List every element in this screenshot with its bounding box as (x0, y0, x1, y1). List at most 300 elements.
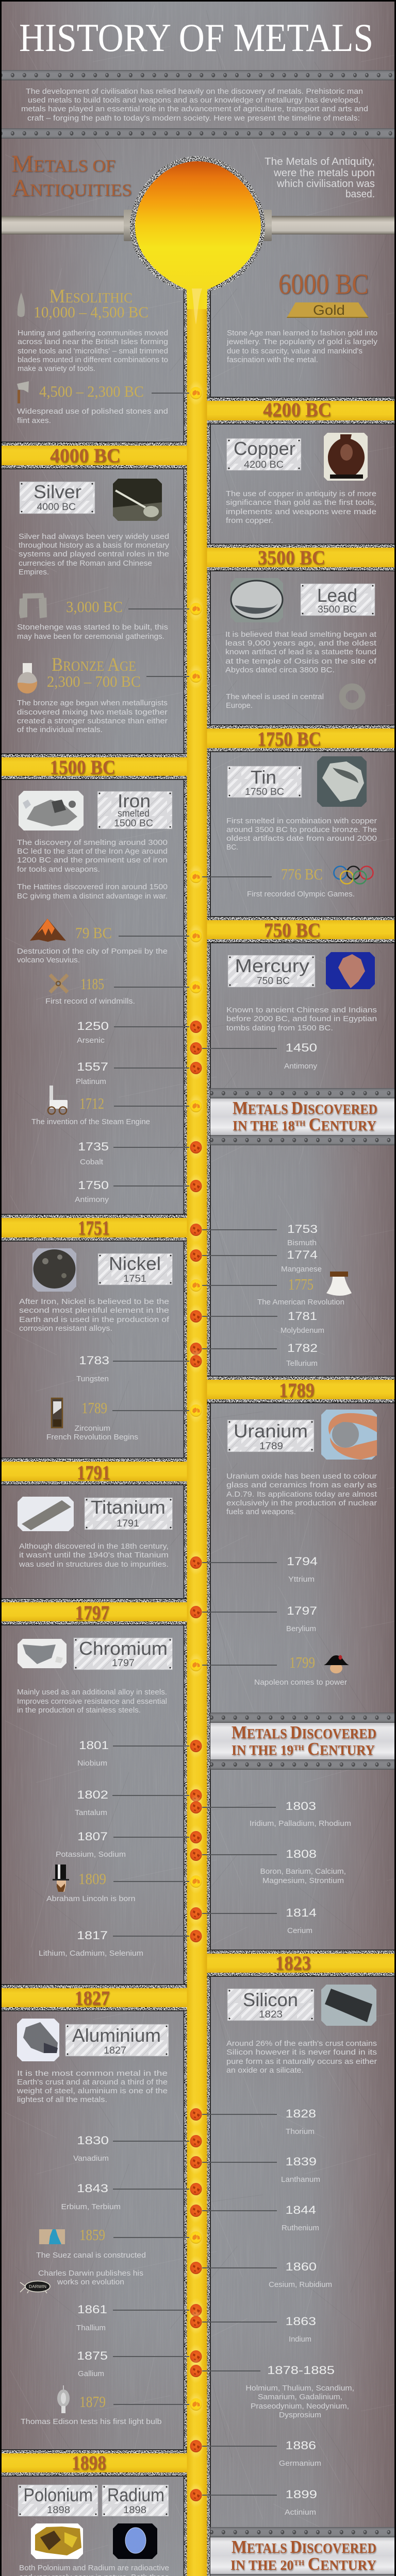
marker: 1809 lincoln: 1809 (78, 1870, 106, 1888)
marker: 1875 gallium: 1875 (77, 2349, 108, 2362)
text block: volcano Vesuvius. (17, 956, 80, 964)
text block: fuels and weapons. (226, 1508, 296, 1516)
marker: 1886 germanium (188, 2434, 321, 2468)
icon: napoleon hat (324, 1655, 349, 1673)
panel: chromium (17, 1638, 172, 1715)
marker: 1886 germanium: Germanium (279, 2460, 321, 2468)
molten metal timeline column (187, 289, 207, 2576)
text block: blades mounted in different combinations to (18, 356, 168, 364)
marker: 1878-1885: Dysprosium (279, 2411, 321, 2419)
marker: 1250 arsenic: Arsenic (77, 1037, 105, 1045)
bar: 4000 BC: 4000 BC (50, 445, 121, 467)
text block: Stonehenge was started to be built, this (17, 623, 168, 632)
bar: 1898 (2, 2449, 188, 2477)
text block: second most plentiful element in the (19, 1307, 169, 1315)
text block (226, 1006, 377, 1032)
bar: 1751: 1751 (78, 1217, 110, 1239)
marker: 1814 cerium (188, 1901, 317, 1935)
bar: 1898: 1898 (72, 2452, 106, 2474)
icon: flask (18, 663, 37, 693)
image: tin splat (317, 756, 367, 807)
plate: nickel: Nickel (109, 1253, 161, 1274)
text block: Known to ancient Chinese and Indians (226, 1006, 377, 1014)
plate: nickel (98, 1253, 172, 1285)
plate: lead (301, 584, 375, 616)
marker: 1783 tungsten: 1783 (79, 1354, 109, 1367)
bar: 3500 BC: 3500 BC (258, 547, 325, 569)
text block: an oxide or a silicate. (226, 2066, 304, 2075)
bar: 1789: 1789 (279, 1379, 315, 1401)
marker: 1753 bismuth: Bismuth (287, 1239, 317, 1247)
marker: 1839 lanthanum: 1839 (286, 2155, 317, 2168)
marker: 1797 berylium: 1797 (287, 1604, 317, 1617)
marker: 1861 thallium: Thallium (76, 2324, 106, 2332)
text block: flint axes. (17, 417, 51, 425)
text block (226, 1472, 377, 1516)
bar: 1823 (207, 1950, 394, 1977)
bar: 1789 (207, 1376, 394, 1403)
text block: tombs dating from 1500 BC. (226, 1024, 333, 1032)
plate: uranium: Uranium (234, 1420, 308, 1442)
icon: suez canal (39, 2229, 65, 2244)
bar: 1750 BC: 1750 BC (257, 728, 321, 750)
text block: weight of steel, aluminium is one of the (16, 2087, 168, 2095)
bar: 4200 BC (207, 397, 394, 425)
text block: it wasn't until the 1940's that Titanium (19, 1551, 169, 1560)
heading: metals of antiquities: METALS OF (11, 150, 116, 177)
text block: After Iron, Nickel is believed to be the (19, 1298, 169, 1306)
marker: 3,000 BC (128, 597, 204, 621)
marker: 1782 tellurium: 1782 (287, 1342, 318, 1354)
bar: 1791: 1791 (77, 1462, 110, 1484)
marker: 1809 lincoln (46, 1869, 204, 1903)
marker: 1753 bismuth: 1753 (287, 1223, 318, 1235)
bar: 1797: 1797 (75, 1602, 109, 1624)
panel: lead (225, 578, 377, 710)
text block: was used in structures due to impurities. (19, 1561, 169, 1569)
image: radium disc (113, 2523, 157, 2559)
plate: uranium: 1789 (259, 1441, 283, 1452)
plate: iron (97, 790, 172, 829)
marker: 1712 steam engine: The invention of the Steam Engine (31, 1118, 150, 1126)
marker: 1878-1885: Praseodynium, Neodynium, (251, 2402, 349, 2411)
text block: The use of copper in antiquity is of more (226, 490, 376, 498)
marker: 1557 platinum: Platinum (76, 1078, 106, 1086)
panel: gold (226, 268, 378, 364)
text block: Improves corrosive resistance and essential (17, 1698, 167, 1706)
text block: from copper. (226, 517, 273, 525)
marker: 1801 niobium (77, 1734, 204, 1768)
marker: 1750 antimony: 1750 (78, 1179, 109, 1192)
text block (226, 329, 378, 364)
marker: 1861 thallium: 1861 (77, 2303, 107, 2316)
bar: 1827: 1827 (74, 1987, 110, 2009)
marker: 1803 iridium (188, 1795, 351, 1828)
marker: 1899 actinium: 1899 (286, 2488, 317, 2501)
text block: known artifact of lead is a statuette found (225, 648, 376, 656)
heading: mesolithic: MESOLITHIC (50, 286, 133, 307)
text block: Europe. (226, 702, 253, 710)
text block: pure form as it naturally occurs as either (226, 2058, 377, 2066)
marker: 1860 cesium: 1860 (286, 2260, 317, 2273)
marker: 2,300 - 700 BC (146, 664, 204, 689)
marker: 1450 antimony: Antimony (284, 1062, 318, 1071)
text block: A.D.79. Its applications today are almost (226, 1490, 377, 1499)
bar: 4200 BC: 4200 BC (263, 399, 332, 421)
text block: Around 26% of the earth's crust contains (226, 2040, 377, 2048)
marker: 1843 erbium (61, 2177, 204, 2211)
date: 10,000 - 4,500 BC: 10,000 – 4,500 BC (34, 303, 148, 321)
banner: metals discovered in the 19th century: METALS DISCOVERED (232, 1722, 376, 1742)
plate: titanium (85, 1497, 172, 1530)
marker: 1863 indium (188, 2310, 316, 2344)
text block: may have been for ceremonial gatherings. (17, 633, 164, 641)
text: olympic games: First recorded Olympic Games. (247, 890, 355, 899)
marker: 1809 lincoln: Abraham Lincoln is born (46, 1895, 135, 1903)
panel: mesolithic (17, 286, 168, 425)
text block: corrosion resistant alloys. (19, 1325, 112, 1333)
plate: silver: Silver (34, 481, 81, 502)
icon: flint spearhead (18, 293, 25, 317)
marker: 1450 antimony (188, 1036, 318, 1071)
text block: It is believed that lead smelting began at (225, 631, 376, 639)
marker: 1803 iridium: 1803 (286, 1800, 316, 1812)
text block: Stone Age man learned to fashion gold into (227, 329, 377, 337)
marker: 1899 actinium (188, 2483, 317, 2517)
marker: 1843 erbium: Erbium, Terbium (61, 2203, 121, 2211)
marker: 1735 cobalt (78, 1135, 204, 1166)
plate: tin (227, 766, 302, 798)
text block: created a stronger substance than either (17, 717, 168, 725)
text block: Silver had always been very widely used (19, 533, 169, 541)
marker: 1839 lanthanum: Lanthanum (281, 2176, 320, 2184)
marker: 1808 boron: Boron, Barium, Calcium, (260, 1868, 346, 1876)
marker: 1843 erbium: 1843 (77, 2182, 108, 2195)
plate: chromium (74, 1638, 172, 1670)
text block: around 3500 BC to produce bronze. The (226, 826, 377, 834)
marker: 1808 boron (188, 1842, 346, 1885)
text block (16, 2070, 168, 2104)
plate: chromium: Chromium (79, 1638, 168, 1659)
text block: make a variety of tools. (18, 365, 95, 373)
banner: metals discovered in the 20th century: ENTURY (320, 2557, 378, 2573)
text block (225, 631, 377, 674)
icon: abraham lincoln (53, 1865, 69, 1892)
icon: olympic rings (334, 867, 373, 884)
heading: 6000 BC: 6000 BC (278, 268, 369, 300)
text block (17, 1688, 167, 1715)
panel: tin (226, 756, 377, 899)
banner: metals discovered in the 18th century: C (309, 1114, 321, 1134)
marker: 1828 thorium: 1828 (286, 2107, 316, 2120)
marker: 79 BC: 79 BC (75, 924, 112, 942)
plate: copper: 4200 BC (244, 460, 284, 470)
image: lead disc (230, 578, 283, 622)
banner: metals discovered in the 18th century: IN THE 18 (233, 1118, 298, 1133)
text block: currencies of the Roman and Chinese (19, 560, 152, 568)
text block: Mainly used as an additional alloy in steels. (17, 1688, 167, 1697)
bar: 1791 (2, 1458, 188, 1485)
plate: radium (102, 2484, 169, 2516)
marker: 1774 manganese: Manganese (281, 1265, 322, 1274)
text block: suez and darwin: The Suez canal is constructed (36, 2251, 146, 2260)
plate: iron: smelted (118, 808, 150, 819)
text block: First smelted in combination with copper (226, 817, 377, 825)
text: the metals of antiquity: were the metals upon (273, 167, 375, 179)
marker: 1886 germanium: 1886 (286, 2439, 316, 2452)
banner: metals discovered in the 20th century: METALS DISCOVERED (232, 2537, 376, 2557)
text block: suez and darwin: Charles Darwin publishes his (38, 2269, 143, 2278)
marker: 1863 indium: 1863 (286, 2315, 316, 2328)
marker: 1774 manganese: 1774 (287, 1248, 318, 1261)
text block (19, 1298, 170, 1333)
text block: in the production of stainless steels. (17, 1706, 141, 1715)
marker: 1814 cerium: Cerium (287, 1927, 312, 1935)
icon: guillotine (52, 1398, 62, 1428)
banner: metals discovered in the 19th century (210, 1713, 394, 1770)
bar: 1500 BC (2, 753, 188, 780)
text block: Widespread use of polished stones and (17, 408, 168, 416)
text block: for tools and weapons. (17, 866, 100, 874)
plate: mercury: Mercury (235, 955, 309, 976)
marker: 1802 tantalum: 1802 (77, 1788, 108, 1801)
icon: windmill (50, 975, 68, 992)
marker: 1861 thallium (76, 2298, 204, 2332)
introduction text: metals have played an essential role in the advancement of agriculture, transport and arts and (21, 105, 368, 113)
riveted rail: upper (2, 70, 394, 80)
marker: 1750 antimony (75, 1174, 204, 1204)
image: chromium crystals (18, 1639, 67, 1668)
marker: 1875 gallium: Gallium (78, 2370, 104, 2378)
marker: 4,500 - 2,300 BC (152, 381, 204, 405)
text block (19, 2564, 169, 2576)
marker: 1830 vanadium: Vanadium (73, 2155, 109, 2163)
bar: 1500 BC: 1500 BC (50, 756, 116, 778)
banner: metals discovered in the 18th century: TH (295, 1120, 306, 1128)
panel: titanium (18, 1497, 172, 1569)
marker: 1878-1885 (188, 2359, 354, 2419)
banner: metals discovered in the 18th century (210, 1088, 394, 1145)
marker: 1899 actinium: Actinium (285, 2509, 316, 2517)
marker: 1817 lithium: Lithium, Cadmium, Selenium (39, 1950, 143, 1958)
text block: implements and weapons were made (226, 508, 376, 516)
plate: uranium (227, 1420, 314, 1452)
marker: 1807 potassium: 1807 (77, 1830, 108, 1843)
introduction text: craft – forging the path to today's modern society. Here we present the timeline of metals: (27, 114, 360, 123)
marker: 1250 arsenic: 1250 (77, 1020, 109, 1032)
text block: Empires. (19, 568, 49, 577)
marker: 1789 zirconium (46, 1398, 204, 1442)
bar: 1750 BC (207, 724, 394, 752)
bar: 750 BC (207, 916, 394, 943)
marker: 1817 lithium (39, 1924, 204, 1958)
marker: 1844 ruthenium: Ruthenium (282, 2224, 319, 2232)
bar: 1751 (2, 1214, 188, 1242)
plate: polonium: 1898 (47, 2505, 70, 2516)
marker: 1450 antimony: 1450 (286, 1041, 317, 1054)
banner: metals discovered in the 20th century: TH (293, 2559, 305, 2567)
text: the metals of antiquity (265, 156, 375, 200)
plate: titanium: Titanium (91, 1497, 166, 1518)
icon: volcano (30, 919, 66, 942)
image: copper vase (324, 433, 368, 481)
text: windmills: First record of windmills. (45, 997, 135, 1006)
text block (17, 947, 168, 964)
marker: 1250 arsenic (77, 1014, 204, 1045)
text: the metals of antiquity: The Metals of Antiquity, (265, 156, 375, 167)
text block: at the temple of Osiris on the site of (225, 657, 377, 666)
plate: lead: Lead (317, 585, 357, 606)
text block: Earth and is used in the production of (19, 1316, 170, 1324)
text block: across land near the British Isles forming (18, 338, 168, 346)
marker: 1878-1885: Holmium, Thulium, Scandium, (245, 2384, 354, 2393)
marker: 1735 cobalt: Cobalt (80, 1158, 103, 1166)
marker: 1735 cobalt: 1735 (78, 1140, 109, 1153)
introduction text: used metals to build tools and weapons and as our knowledge of metallurgy has developed, (28, 96, 360, 105)
panel: copper (226, 433, 376, 525)
plate: polonium: Polonium (24, 2484, 93, 2505)
pipe (2, 210, 394, 241)
riveted rail: lower (2, 128, 394, 139)
text block: least 9,000 years ago, and the oldest (225, 639, 376, 648)
marker: 1807 potassium: Potassium, Sodium (56, 1851, 126, 1859)
image: aluminium rock (17, 2019, 59, 2061)
marker: 1802 tantalum (75, 1783, 204, 1817)
text block (226, 2040, 377, 2075)
banner: metals discovered in the 19th century: C (307, 1739, 320, 1759)
banner: metals discovered in the 18th century: METALS DISCOVERED (233, 1098, 377, 1118)
marker: 1782 tellurium (188, 1336, 318, 1368)
marker: 1782 tellurium: Tellurium (286, 1360, 318, 1368)
text block (19, 533, 170, 577)
bar: 3500 BC (207, 544, 394, 571)
marker: 1185: 1185 (80, 975, 104, 993)
plate: copper: Copper (234, 438, 295, 459)
marker: 1801 niobium: Niobium (77, 1759, 107, 1768)
plate: nickel: 1751 (123, 1274, 146, 1284)
marker: 1789 zirconium: 1789 (81, 1399, 107, 1417)
icon: steam engine (48, 1086, 68, 1114)
text block (17, 883, 168, 901)
text block (17, 623, 168, 641)
text block (17, 839, 168, 874)
text block: The wheel is used in central (226, 693, 324, 701)
plate: mercury: 750 BC (257, 976, 290, 987)
marker: 1781 molybdenum: Molybdenum (280, 1327, 324, 1335)
bar: 1823: 1823 (275, 1952, 311, 1974)
plate: mercury (228, 955, 315, 987)
marker: 1814 cerium: 1814 (286, 1906, 317, 1919)
text block: throughout history as a basis for monetary (19, 541, 170, 550)
icon: darwin fish (20, 2281, 50, 2293)
date: 2,300 - 700 BC: 2,300 – 700 BC (47, 672, 141, 690)
marker: 1879 edison: 1879 (79, 2393, 106, 2411)
text block: suez and darwin: works on evolution (57, 2278, 124, 2286)
text: the metals of antiquity: which civilisation was (276, 178, 375, 190)
plate: tin: 1750 BC (245, 787, 284, 798)
text block: Destruction of the city of Pompeii by the (17, 947, 168, 956)
icon: stone wheel (342, 687, 362, 706)
panel: uranium (226, 1410, 377, 1516)
marker: 1775 american revolution (188, 1273, 344, 1307)
marker: 1875 gallium (77, 2344, 204, 2378)
text block: The Hattites discovered iron around 1500 (17, 883, 168, 891)
marker: 1878-1885: 1878-1885 (267, 2364, 335, 2377)
text block: It is the most common metal in the (17, 2070, 168, 2078)
plate: tin: Tin (251, 767, 276, 788)
marker: 1794 yttrium: 1794 (287, 1555, 318, 1568)
text block: jewellery. The popularity of gold is largely (226, 338, 378, 346)
text block: Earth's crust and at around a third of the (17, 2078, 168, 2087)
banner: metals discovered in the 20th century (210, 2527, 394, 2576)
plate: titanium: 1791 (117, 1518, 139, 1529)
marker: 1797 berylium (188, 1600, 317, 1633)
marker: 1844 ruthenium (188, 2198, 319, 2232)
marker: 1557 platinum (76, 1056, 204, 1086)
text block: discovered mixing two metals together (17, 708, 168, 717)
text block (18, 329, 168, 373)
marker: 1801 niobium: 1801 (79, 1739, 109, 1752)
heading: metals of antiquities (11, 150, 132, 201)
text block: Silicon however it is never found in its (226, 2048, 377, 2057)
plate: radium: Radium (107, 2484, 164, 2505)
text block: significance than gold as the first tools, (226, 499, 376, 507)
panel: iron (17, 790, 172, 1006)
text block: due to its scarcity, value and mankind's (227, 347, 362, 355)
text block: Both Polonium and Radium are radioactive (19, 2564, 169, 2572)
bar: 750 BC: 750 BC (264, 919, 321, 941)
marker: 1712 steam engine (31, 1086, 204, 1126)
banner: metals discovered in the 20th century: C (308, 2554, 320, 2574)
marker: 1799 napoleon: Napoleon comes to power (254, 1679, 347, 1687)
image: silicon ingot (321, 1985, 376, 2026)
marker: 1828 thorium: Thorium (286, 2128, 315, 2136)
panel: aluminium (16, 2019, 169, 2104)
timeline markers (21, 381, 366, 2576)
text block (226, 490, 376, 525)
heading: bronze age: BRONZE AGE (52, 654, 136, 675)
plate: polonium (18, 2484, 98, 2516)
marker: 1783 tungsten (76, 1349, 204, 1383)
plate: silver (20, 481, 95, 514)
text block: Although discovered in the 18th century, (19, 1543, 169, 1551)
text block: systems and played central roles in the (19, 550, 169, 558)
marker: 1859 (79, 2225, 204, 2250)
marker: 1712 steam engine: 1712 (79, 1094, 104, 1112)
text block: fascination with the metal. (227, 356, 318, 364)
date: 4,500 - 2,300 BC: 4,500 – 2,300 BC (39, 382, 144, 400)
marker: 776 BC (188, 865, 323, 889)
plate: silver: 4000 BC (37, 502, 76, 513)
marker: 1830 vanadium: 1830 (77, 2134, 109, 2147)
marker: 1794 yttrium (188, 1550, 318, 1584)
banner: metals discovered in the 19th century: IN THE 19 (232, 1742, 297, 1758)
text block: Uranium oxide has been used to colour (226, 1472, 377, 1481)
marker: 1750 antimony: Antimony (75, 1196, 109, 1204)
banner: metals discovered in the 19th century: TH (293, 1744, 304, 1752)
image: uranium disc held in gloves (321, 1410, 377, 1460)
panel: mercury (226, 952, 377, 1032)
plate: silicon (227, 1989, 314, 2021)
gold ingot label (287, 302, 369, 318)
timeline column borders (184, 289, 211, 2576)
marker: 1803 iridium: Iridium, Palladium, Rhodium (250, 1820, 351, 1828)
bar: 1797 (2, 1598, 188, 1625)
text: the metals of antiquity: based. (345, 189, 375, 200)
text block (17, 699, 168, 734)
image: silver spoon (113, 479, 162, 521)
icon: darwin fish: DARWIN (29, 2284, 46, 2289)
